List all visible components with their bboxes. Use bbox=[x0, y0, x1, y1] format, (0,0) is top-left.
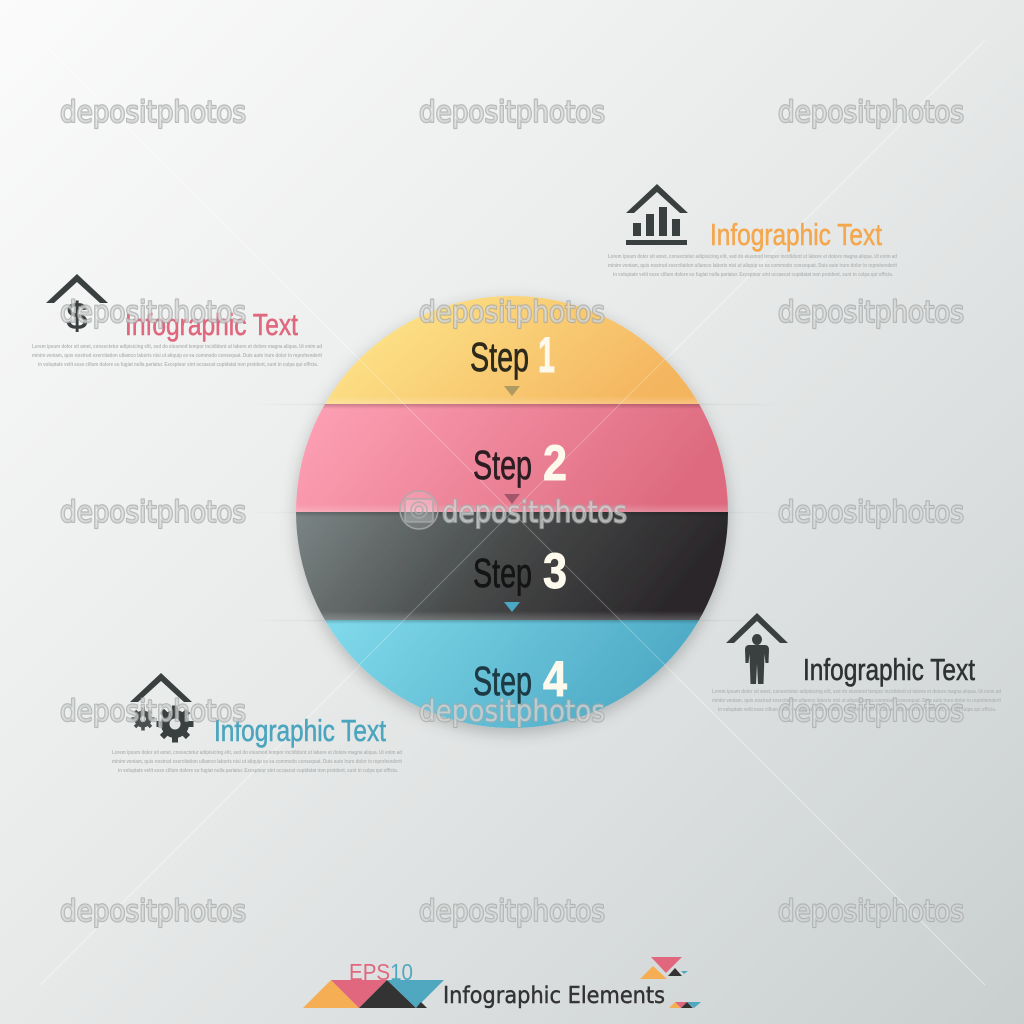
panel: left text bbox=[32, 274, 322, 368]
arrow: step 2 bbox=[504, 494, 520, 504]
watermarks: depositphotos bbox=[60, 495, 246, 529]
body text: in voluptate velit esse cillum dolore eu fugiat nulla pariatur. Excepteur sint occaecat cupidatat non proident, sunt in culpa qui officia. bbox=[38, 362, 318, 368]
panel: right text bbox=[712, 613, 1001, 713]
heading: Infographic Text bbox=[710, 217, 882, 252]
body text bbox=[32, 344, 322, 368]
icon: house with dollar: $ bbox=[66, 296, 88, 338]
icon: house with person bbox=[726, 613, 788, 684]
icon: watermark camera bbox=[400, 491, 438, 529]
body text bbox=[608, 254, 897, 278]
step 3 label: Step bbox=[473, 550, 532, 596]
watermarks: depositphotos bbox=[419, 894, 605, 928]
band: step 3 bbox=[296, 512, 728, 620]
watermarks: depositphotos bbox=[60, 95, 246, 129]
band: step 2 bbox=[296, 404, 728, 512]
watermarks: depositphotos bbox=[60, 694, 246, 728]
heading: Infographic Text bbox=[125, 307, 298, 342]
panel: bottom left text bbox=[112, 673, 402, 774]
body text bbox=[712, 689, 1001, 713]
footer logo bbox=[303, 957, 701, 1009]
step 3 label: 3 bbox=[543, 543, 567, 599]
step 1 label: Step bbox=[470, 334, 529, 380]
watermarks: depositphotos bbox=[419, 95, 605, 129]
step 1 label: 1 bbox=[538, 327, 555, 383]
watermarks: depositphotos bbox=[419, 694, 605, 728]
step 4 label: Step bbox=[473, 658, 532, 704]
body text: in voluptate velit esse cillum dolore eu fugiat nulla pariatur. Excepteur sint occaecat cupidatat non proident, sunt in culpa qui officia. bbox=[118, 768, 398, 774]
body text: minim veniam, quis nostrud exercitation ullamco laboris nisi ut aliquip ex ea commodo consequat. Duis aute irure dolor in reprehenderit bbox=[608, 263, 897, 269]
circle of four steps bbox=[296, 296, 728, 728]
arrow: step 3 bbox=[504, 602, 520, 612]
watermarks: depositphotos bbox=[778, 495, 964, 529]
watermarks: depositphotos bbox=[778, 95, 964, 129]
body text: minim veniam, quis nostrud exercitation ullamco laboris nisi ut aliquip ex ea commodo consequat. Duis aute irure dolor in reprehenderit bbox=[32, 353, 322, 359]
body text bbox=[112, 750, 402, 774]
watermarks: depositphotos bbox=[778, 694, 964, 728]
body text: Lorem ipsum dolor sit amet, consectetur adipisicing elit, sed do eiusmod tempor incididunt ut labore et dolore magna aliqua. Ut enim ad bbox=[32, 344, 322, 350]
small triangles bbox=[640, 957, 701, 1008]
body text: in voluptate velit esse cillum dolore eu fugiat nulla pariatur. Excepteur sint occaecat cupidatat non proident, sunt in culpa qui officia. bbox=[613, 272, 893, 278]
band: step 1 bbox=[324, 294, 700, 404]
icon: house with dollar bbox=[46, 274, 108, 338]
band: step 4 bbox=[296, 620, 728, 728]
footer title: Infographic Elements bbox=[443, 983, 665, 1009]
watermarks: depositphotos bbox=[60, 295, 246, 329]
body text: Lorem ipsum dolor sit amet, consectetur adipisicing elit, sed do eiusmod tempor incididunt ut labore et dolore magna aliqua. Ut enim ad bbox=[112, 750, 402, 756]
step 2 label: 2 bbox=[543, 435, 567, 491]
logo triangles bbox=[303, 980, 444, 1008]
icon: house with gears bbox=[130, 673, 194, 742]
watermarks: depositphotos bbox=[419, 295, 605, 329]
edition label: EPS10 bbox=[349, 959, 413, 985]
panel: top right text bbox=[608, 184, 897, 278]
watermarks bbox=[60, 95, 964, 928]
watermarks: depositphotos bbox=[778, 894, 964, 928]
watermarks: depositphotos bbox=[442, 495, 627, 529]
watermarks: depositphotos bbox=[60, 894, 246, 928]
heading: Infographic Text bbox=[803, 652, 975, 687]
arrow: step 1 bbox=[504, 386, 520, 396]
heading: Infographic Text bbox=[214, 713, 386, 748]
body text: Lorem ipsum dolor sit amet, consectetur adipisicing elit, sed do eiusmod tempor incididunt ut labore et dolore magna aliqua. Ut enim ad bbox=[608, 254, 897, 260]
step 2 label: Step bbox=[473, 442, 532, 488]
step 4 label: 4 bbox=[543, 651, 567, 707]
watermarks: depositphotos bbox=[778, 295, 964, 329]
icon: house with bar chart bbox=[626, 184, 688, 245]
body text: minim veniam, quis nostrud exercitation ullamco laboris nisi ut aliquip ex ea commodo consequat. Duis aute irure dolor in reprehenderit bbox=[112, 759, 402, 765]
